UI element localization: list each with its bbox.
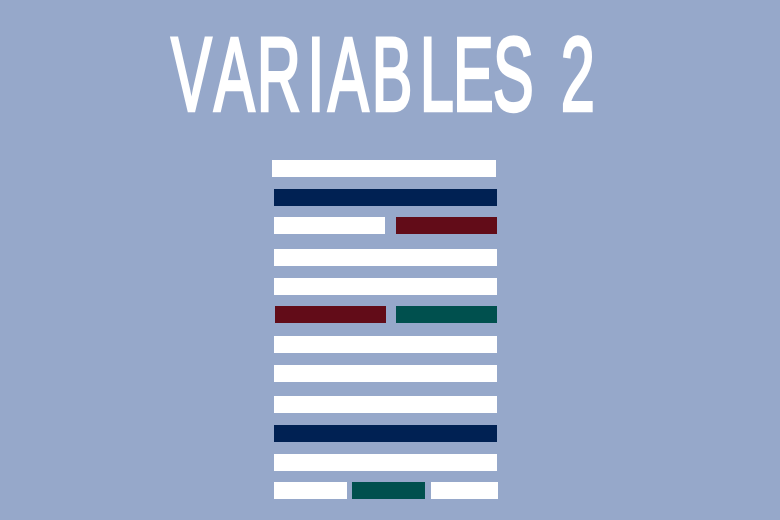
row 6: red segment bbox=[274, 306, 386, 323]
row 6: green segment bbox=[396, 306, 497, 323]
row 2: navy bar bbox=[274, 189, 497, 206]
row 9: white bar bbox=[274, 396, 497, 413]
row 3: red segment bbox=[396, 217, 496, 234]
row 11: white bar bbox=[274, 454, 497, 471]
row 10: navy bar bbox=[274, 425, 497, 442]
bar stack bbox=[272, 160, 498, 499]
row 12: white segment bbox=[431, 482, 498, 499]
row 4: white bar bbox=[274, 248, 497, 266]
row 1: white bar bbox=[272, 160, 496, 176]
row 3: white segment bbox=[274, 217, 385, 234]
row 5: white bar bbox=[274, 278, 497, 294]
row 7: white bar bbox=[274, 336, 497, 353]
row 12: green segment bbox=[352, 482, 425, 499]
row 8: white bar bbox=[274, 365, 497, 382]
row 12: white segment bbox=[274, 482, 346, 499]
